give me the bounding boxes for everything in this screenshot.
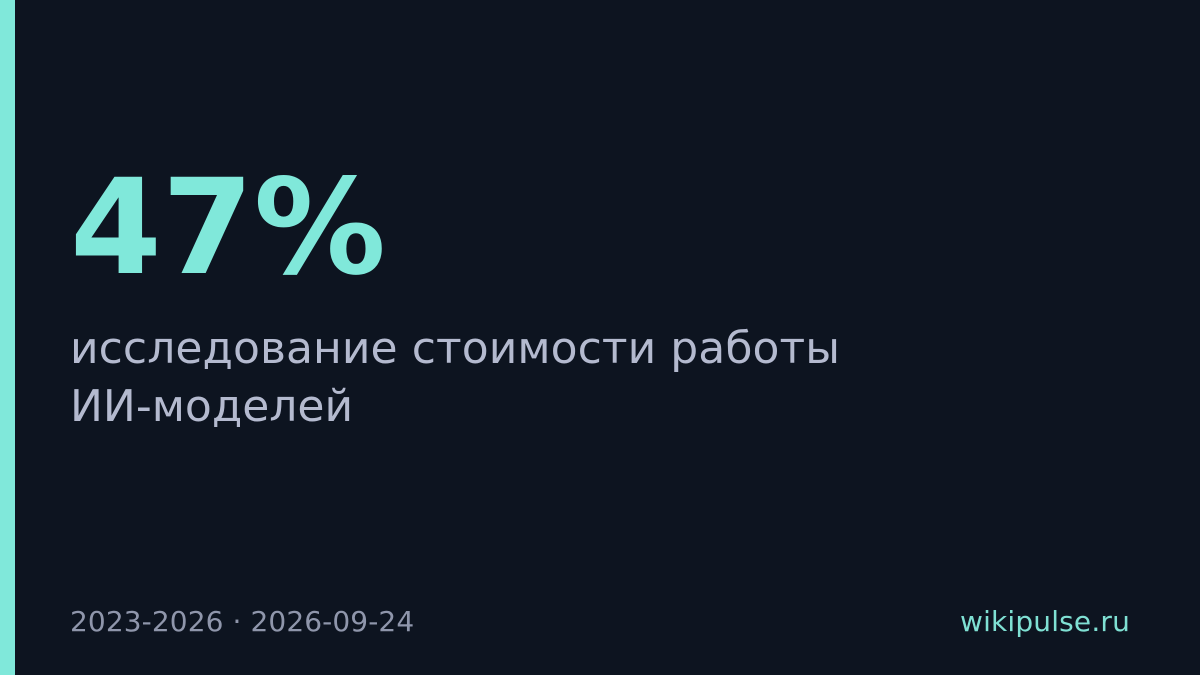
accent bar <box>0 0 15 675</box>
big number: 47% <box>70 151 386 305</box>
site name: wikipulse.ru <box>960 605 1130 638</box>
subtitle: ИИ-моделей <box>70 381 353 432</box>
subtitle: исследование стоимости работы <box>70 323 840 374</box>
subtitle <box>70 323 840 432</box>
date range: 2023-2026 · 2026-09-24 <box>70 605 414 638</box>
